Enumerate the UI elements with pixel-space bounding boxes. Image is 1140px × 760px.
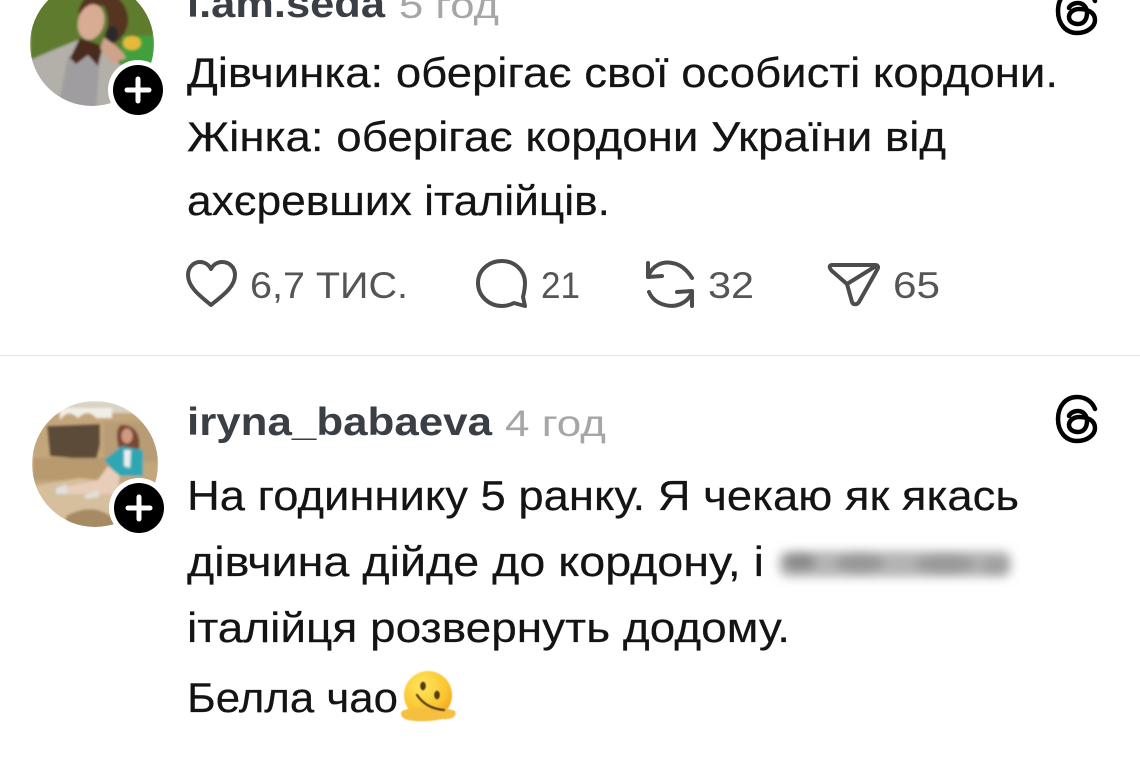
comment text: Белла чао bbox=[187, 674, 398, 721]
comment text: Жінка: оберігає кордони України від bbox=[187, 113, 946, 160]
comment text: Дівчинка: оберігає свої особисті кордони. bbox=[187, 49, 1058, 96]
blurred redacted word bbox=[779, 551, 1011, 577]
panel: first comment bbox=[30, 0, 1095, 306]
icon: comment bubble bbox=[478, 261, 525, 306]
icon: repost arrows bbox=[648, 263, 692, 306]
avatar: woman sitting on stone ruins bbox=[32, 401, 169, 538]
icon: threads logo bbox=[1058, 0, 1095, 33]
username and time: iryna_babaeva bbox=[187, 401, 492, 444]
icon: melting face emoji bbox=[401, 671, 456, 721]
icon: threads logo bbox=[1058, 397, 1095, 441]
comment text bbox=[187, 49, 1058, 224]
shares count: 65 bbox=[893, 265, 940, 306]
likes count: 6,7 ТИС. bbox=[250, 265, 408, 306]
username and time bbox=[187, 401, 606, 444]
divider bbox=[0, 355, 1140, 356]
comment text: На годиннику 5 ранку. Я чекаю як якась bbox=[187, 472, 1019, 519]
comment text: італійця розвернуть додому. bbox=[187, 604, 790, 651]
comment text bbox=[187, 472, 1019, 721]
icon: heart bbox=[188, 262, 235, 305]
badge: follow plus bbox=[108, 60, 168, 120]
comments count: 21 bbox=[541, 265, 580, 306]
reposts count: 32 bbox=[708, 265, 754, 306]
engagement stats row bbox=[188, 261, 940, 306]
icon: send arrow bbox=[830, 265, 878, 304]
username and time: 4 год bbox=[505, 403, 606, 444]
username and time bbox=[187, 0, 499, 26]
avatar: woman in grey blazer bbox=[30, 0, 168, 120]
comment text: дівчина дійде до кордону, і bbox=[187, 538, 764, 585]
panel: second comment bbox=[32, 397, 1095, 721]
comment text: ахєревших італійців. bbox=[187, 177, 610, 224]
badge: follow plus bbox=[109, 478, 169, 538]
